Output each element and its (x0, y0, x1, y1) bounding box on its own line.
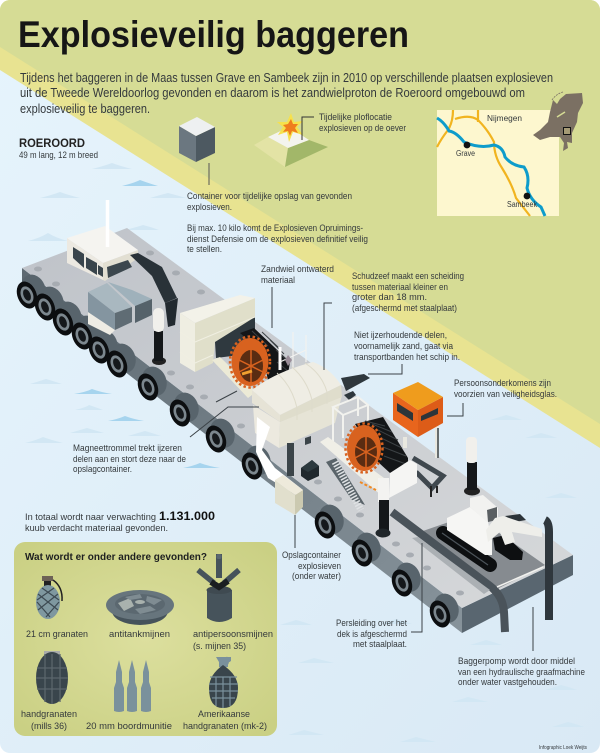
water ripples (25, 163, 584, 742)
label: storage container under water: Opslagcontainer (282, 550, 341, 561)
label: pressure pipe: met staalplaat. (353, 639, 407, 650)
location map: Grave (456, 149, 475, 158)
icon: storage container cube (179, 117, 215, 185)
label: anti-tank mines: antitankmijnen (109, 629, 170, 640)
label: dredge pump (458, 656, 585, 688)
bollard left (152, 308, 166, 365)
conveyor frame on the deck (413, 458, 443, 497)
label: anti-personnel mines: (s. mijnen 35) (193, 641, 246, 652)
label: shaker: (afgeschermd met staalplaat) (352, 303, 457, 314)
total volume (25, 511, 215, 534)
icon: mills grenade (36, 651, 68, 704)
ship name (19, 136, 98, 160)
sand wheel 2 (346, 417, 408, 473)
label: dredge pump: Baggerpomp wordt door middel (458, 656, 575, 667)
label: pressure pipe: dek is afgeschermd (337, 629, 407, 640)
opslagcontainer under water (275, 475, 303, 515)
intro text (20, 70, 553, 116)
white frame above wheel 1 (280, 332, 306, 385)
excavator (442, 495, 542, 565)
bright water ripples (74, 180, 220, 468)
label: shaker: tussen materiaal kleiner en (352, 282, 448, 293)
personnel cabin (orange) (393, 382, 443, 458)
icon: mk-2 grenade (209, 657, 238, 708)
barge hull (22, 228, 573, 633)
label: anti-personnel mines (193, 629, 273, 652)
label: american grenades: handgranaten (mk-2) (183, 721, 267, 732)
total volume: 1.131.000 (159, 511, 215, 523)
label: dredge pump: onder water vastgehouden. (458, 677, 557, 688)
label: container (187, 191, 368, 255)
label: storage container under water: explosieven (298, 561, 341, 572)
label: pressure pipe: Persleiding over het (336, 618, 407, 629)
conveyor to the next section (341, 374, 370, 400)
suction pipe (545, 520, 549, 620)
icon: anti-personnel mine (198, 554, 239, 622)
sand wheel 1 (230, 328, 290, 390)
label: magnet drum: opslagcontainer. (73, 464, 132, 475)
label: explosion site: explosieven op de oever (319, 123, 406, 134)
label: anti-personnel mines: antipersoonsmijnen (193, 629, 273, 640)
label: container: explosieven. (187, 202, 232, 213)
storage bins on the deck (88, 282, 152, 335)
total volume: kuub verdacht materiaal gevonden. (25, 523, 168, 534)
label: explosion site: Tijdelijke ploflocatie (319, 112, 392, 123)
deck stripe (497, 567, 543, 587)
label: container: Bij max. 10 kilo komt de Explosieven Opruimings- (187, 223, 363, 234)
label: personnel: voorzien van veiligheidsglas. (454, 389, 557, 400)
label: non-ferrous: voornamelijk zand, gaat via (354, 341, 454, 352)
leader lines (190, 287, 533, 651)
label: container: te stellen. (187, 244, 222, 255)
location map (437, 110, 559, 216)
label: american grenades (183, 709, 267, 732)
excavator platform (420, 514, 545, 590)
generator block (180, 295, 256, 398)
location map: Sambeek (507, 200, 538, 209)
icon: anti-tank mine (106, 590, 174, 625)
slab and ladder (320, 437, 384, 510)
panel heading: Wat wordt er onder andere gevonden? (25, 551, 207, 563)
title: Explosieveilig baggeren (18, 14, 409, 55)
label: sand wheel: materiaal (261, 275, 295, 286)
label: mills grenades: (mills 36) (31, 721, 67, 732)
cabin with crane arm (67, 200, 178, 327)
label: non-ferrous: transportbanden het schip in. (354, 352, 460, 363)
label: mills grenades: handgranaten (21, 709, 77, 720)
label: shaker (352, 271, 464, 314)
label: non-ferrous: Niet ijzerhoudende delen, (354, 330, 447, 341)
tyres along the hull (11, 271, 464, 631)
icon: explosion site on the bank (254, 113, 328, 167)
label: container: Container voor tijdelijke opslag van gevonden (187, 191, 352, 202)
shaker hopper (252, 362, 342, 495)
label: ammunition: 20 mm boordmunitie (86, 721, 172, 732)
intro text: uit de Tweede Wereldoorlog gevonden en daarom is het zandwielproton de Roeroord omgebouwd om (20, 85, 525, 100)
location map: Nijmegen (487, 113, 522, 123)
intro text: explosieveilig te baggeren. (20, 101, 150, 116)
label: personnel: Persoonsonderkomens zijn (454, 378, 551, 389)
icon: 20 mm ammunition (114, 660, 151, 712)
label: explosion site (319, 112, 406, 134)
label: magnet drum (73, 443, 186, 475)
label: pressure pipe (336, 618, 407, 650)
label: 21 cm grenades: 21 cm granaten (26, 629, 88, 640)
panel: what was found (14, 542, 277, 736)
label: sand wheel: Zandwiel ontwaterd (261, 264, 334, 275)
label: sand wheel (261, 264, 334, 286)
label: personnel (454, 378, 557, 400)
label: non-ferrous (354, 330, 460, 363)
map of the Netherlands (533, 92, 583, 151)
label: shaker: Schudzeef maakt een scheiding (352, 271, 464, 282)
label: container: dienst Defensie om de explosieven definitief veilig (187, 234, 368, 245)
label: storage container under water (282, 550, 341, 582)
label: american grenades: Amerikaanse (198, 709, 250, 720)
pipe shielding band (412, 537, 490, 594)
credit: Infographic Loek Weijts (539, 745, 587, 751)
frame over wheel 2 (333, 397, 368, 442)
label: shaker: groter dan 18 mm. (352, 292, 427, 303)
deck bolts (34, 250, 464, 596)
ship name: 49 m lang, 12 m breed (19, 150, 98, 160)
ship name: ROEROORD (19, 136, 85, 150)
black box on the deck (301, 460, 319, 481)
label: magnet drum: delen aan en stort deze naar de (73, 454, 186, 465)
pressure pipe over the deck (392, 512, 505, 632)
total volume: In totaal wordt naar verwachting (25, 512, 156, 523)
white block and post (376, 460, 417, 538)
label: storage container under water: (onder water) (292, 571, 341, 582)
icon: 21 cm grenade (36, 576, 62, 619)
label: mills grenades (21, 709, 77, 732)
bollard right (464, 437, 480, 496)
label: magnet drum: Magneettrommel trekt ijzeren (73, 443, 182, 454)
